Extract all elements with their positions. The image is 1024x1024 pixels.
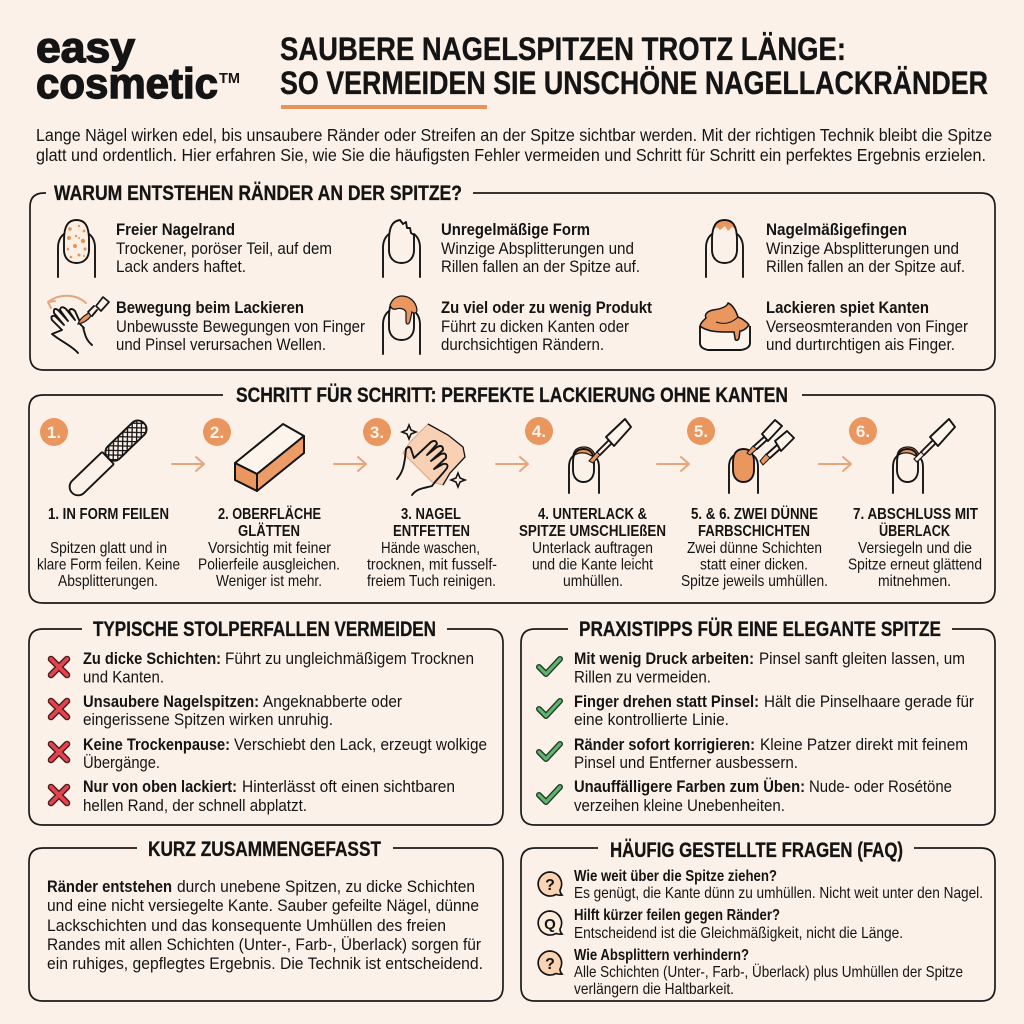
- step 6: 6.: [856, 422, 870, 441]
- praxistipps list: Pinsel und Entferner ausbessern.: [574, 753, 798, 772]
- panel: kurz zusammengefasst: [29, 838, 503, 1001]
- arrow 4: [657, 457, 689, 471]
- faq 1: [538, 868, 983, 902]
- x icons: [51, 659, 67, 803]
- title: [280, 31, 988, 109]
- summary text: [47, 877, 483, 973]
- faq 3: verlängern die Haltbarkeit.: [574, 981, 734, 998]
- step 6: Versiegeln und die: [858, 540, 972, 557]
- stolperfallen list: Nur von oben lackiert:: [83, 777, 237, 796]
- stolperfallen list: Führt zu ungleichmäßigem Trocknen: [225, 649, 474, 668]
- step 4: und die Kante leicht: [532, 556, 654, 574]
- logo: cosmetic: [36, 60, 218, 108]
- praxistipps list: Kleine Patzer direkt mit feinem: [760, 735, 968, 754]
- faq 3: Alle Schichten (Unter-, Farb-, Überlack) plus Umhüllen der Spitze: [574, 963, 963, 981]
- stolperfallen list: Verschiebt den Lack, erzeugt wolkige: [234, 735, 487, 754]
- summary text: Randes mit allen Schichten (Unter-, Farb-, Überlack) sorgen für: [47, 935, 481, 954]
- step 4: 4.: [532, 422, 546, 441]
- item: bewegung beim lackieren: Unbewusste Bewegungen von Finger: [116, 317, 365, 336]
- item: zu viel oder zu wenig produkt: durchsichtigen Rändern.: [441, 335, 604, 354]
- stolperfallen list: Zu dicke Schichten:: [83, 649, 221, 668]
- faq 3: [538, 947, 963, 998]
- step 2: Weniger ist mehr.: [216, 573, 322, 590]
- item: nagelmaessigefingen: Winzige Absplitterungen und: [766, 239, 959, 258]
- step 3: 3.: [370, 423, 384, 442]
- arrow 5: [819, 457, 851, 471]
- item: zu viel oder zu wenig produkt: Führt zu dicken Kanten oder: [441, 317, 629, 336]
- item: nagelmaessigefingen: Nagelmäßigefingen: [766, 220, 907, 239]
- stolperfallen list: [83, 649, 487, 815]
- praxistipps list: Mit wenig Druck arbeiten:: [574, 649, 754, 668]
- summary text: ein ruhiges, gepflegtes Ergebnis. Die Technik ist entscheidend.: [47, 954, 483, 973]
- item: nagelmaessigefingen: Rillen fallen an der Spitze auf.: [766, 257, 965, 276]
- step 3: freiem Tuch reinigen.: [367, 573, 496, 590]
- step 6: mitnehmen.: [878, 573, 951, 590]
- step 1: 1.: [47, 423, 61, 442]
- panel: praxistipps: [521, 618, 995, 825]
- step 3: ENTFETTEN: [393, 523, 470, 540]
- faq 1: Wie weit über die Spitze ziehen?: [574, 868, 777, 885]
- praxistipps list: Nude- oder Rosétöne: [809, 777, 952, 796]
- item: unregelmaessige form: Unregelmäßige Form: [441, 220, 590, 239]
- summary text: durch unebene Spitzen, zu dicke Schichten: [177, 877, 475, 896]
- item: unregelmaessige form: Rillen fallen an der Spitze auf.: [441, 257, 640, 276]
- step 3: 3. NAGEL: [401, 506, 461, 523]
- step 4: [519, 417, 666, 590]
- item: bewegung beim lackieren: Bewegung beim Lackieren: [116, 298, 304, 317]
- stolperfallen list: Hinterlässt oft einen sichtbaren: [242, 777, 455, 796]
- heading: warum: WARUM ENTSTEHEN RÄNDER AN DER SPITZE?: [54, 182, 462, 205]
- summary text: Ränder entstehen: [47, 877, 172, 896]
- praxistipps list: Pinsel sanft gleiten lassen, um: [759, 649, 965, 668]
- stolperfallen list: Angeknabberte oder: [263, 692, 402, 711]
- panel: warum entstehen raender: [30, 182, 995, 370]
- item: freier nagelrand: Lack anders haftet.: [116, 257, 246, 276]
- step 2: [198, 418, 340, 590]
- praxistipps list: Hält die Pinselhaare gerade für: [764, 692, 974, 711]
- step 1: 1. IN FORM FEILEN: [48, 506, 169, 523]
- step 5: Zwei dünne Schichten: [687, 540, 822, 557]
- praxistipps list: verzeihen kleine Unebenheiten.: [574, 796, 785, 815]
- step 5: Spitze jeweils umhüllen.: [681, 573, 828, 590]
- step 6: Spitze erneut glättend: [848, 556, 982, 574]
- step 5: 5. & 6. ZWEI DÜNNE: [691, 504, 818, 523]
- step 2: 2. OBERFLÄCHE: [218, 505, 321, 523]
- step 2: 2.: [210, 423, 224, 442]
- panel: stolperfallen: [29, 618, 503, 825]
- item: lackieren spiet kanten: Lackieren spiet Kanten: [766, 298, 929, 317]
- item: bewegung beim lackieren: [48, 296, 365, 354]
- step 2: GLÄTTEN: [238, 522, 300, 540]
- summary text: Lackschichten und das konsequente Umhüllen des freien: [47, 916, 446, 935]
- step 5: 5.: [694, 422, 708, 441]
- arrow 3: [496, 457, 528, 471]
- panel: schritt fuer schritt: [29, 384, 995, 603]
- heading: praxistipps: PRAXISTIPPS FÜR EINE ELEGANTE SPITZE: [579, 618, 941, 641]
- logo: easy: [36, 24, 135, 72]
- step 5: [681, 417, 828, 590]
- praxistipps list: Ränder sofort korrigieren:: [574, 735, 755, 754]
- praxistipps list: Rillen zu vermeiden.: [574, 668, 711, 686]
- panel: faq: [521, 839, 995, 1001]
- item: freier nagelrand: Trockener, poröser Teil, auf dem: [116, 239, 332, 258]
- stolperfallen list: Unsaubere Nagelspitzen:: [83, 692, 259, 711]
- step 4: SPITZE UMSCHLIEßEN: [519, 523, 666, 540]
- step 5: FARBSCHICHTEN: [698, 523, 810, 540]
- step 1: [37, 417, 180, 590]
- step 1: Absplitterungen.: [58, 573, 158, 590]
- item: freier nagelrand: [58, 220, 332, 277]
- item: lackieren spiet kanten: [700, 298, 968, 354]
- step 3: trocknen, mit fusself-: [367, 556, 497, 574]
- arrow 1: [172, 457, 204, 471]
- step 3: [363, 418, 497, 590]
- faq 2: Entscheidend ist die Gleichmäßigkeit, nicht die Länge.: [574, 925, 903, 942]
- step 2: Vorsichtig mit feiner: [208, 540, 331, 557]
- step 5: statt einer dicken.: [700, 556, 808, 574]
- praxistipps list: Unauffälligere Farben zum Üben:: [574, 777, 805, 796]
- item: lackieren spiet kanten: Verseosmteranden von Finger: [766, 317, 968, 336]
- faq 2: [538, 907, 903, 942]
- item: unregelmaessige form: [383, 220, 640, 277]
- heading: stolperfallen: TYPISCHE STOLPERFALLEN VERMEIDEN: [93, 618, 436, 641]
- praxistipps list: [574, 649, 974, 815]
- step 1: klare Form feilen. Keine: [37, 556, 180, 574]
- stolperfallen list: hellen Rand, der schnell abplatzt.: [83, 796, 307, 815]
- stolperfallen list: Keine Trockenpause:: [83, 735, 230, 754]
- step 4: Unterlack auftragen: [532, 540, 653, 557]
- item: nagelmaessigefingen: [706, 220, 965, 277]
- item: unregelmaessige form: Winzige Absplitterungen und: [441, 239, 634, 258]
- logo: TM: [219, 70, 240, 87]
- step 6: ÜBERLACK: [879, 521, 950, 540]
- check icons: [539, 659, 560, 802]
- step 4: 4. UNTERLACK &: [538, 506, 647, 523]
- title: SAUBERE NAGELSPITZEN TROTZ LÄNGE:: [280, 31, 846, 67]
- intro text: [36, 125, 992, 165]
- heading: zusammenfassung: KURZ ZUSAMMENGEFASST: [148, 838, 381, 861]
- step 6: [848, 417, 982, 590]
- step 1: Spitzen glatt und in: [50, 540, 167, 557]
- faq 3: ?: [545, 956, 555, 973]
- summary text: und eine nicht versiegelte Kante. Sauber gefeilte Nägel, dünne: [47, 896, 479, 915]
- item: zu viel oder zu wenig produkt: [383, 296, 652, 354]
- item: lackieren spiet kanten: und durtırchtigen ais Finger.: [766, 335, 955, 354]
- item: zu viel oder zu wenig produkt: Zu viel oder zu wenig Produkt: [441, 298, 652, 317]
- praxistipps list: Finger drehen statt Pinsel:: [574, 692, 759, 711]
- faq 2: Hilft kürzer feilen gegen Ränder?: [574, 907, 780, 924]
- arrow 2: [334, 457, 366, 471]
- faq 3: Wie Absplittern verhindern?: [574, 947, 749, 964]
- step 2: Polierfeile ausgleichen.: [198, 556, 340, 574]
- step 6: 7. ABSCHLUSS MIT: [853, 506, 978, 523]
- faq 2: Q: [544, 916, 556, 933]
- praxistipps list: eine kontrollierte Linie.: [574, 710, 729, 729]
- item: freier nagelrand: Freier Nagelrand: [116, 220, 235, 239]
- heading: schritte: SCHRITT FÜR SCHRITT: PERFEKTE LACKIERUNG OHNE KANTEN: [236, 384, 788, 407]
- step 3: Hände waschen,: [381, 540, 480, 557]
- item: bewegung beim lackieren: und Pinsel verursachen Wellen.: [116, 335, 326, 354]
- stolperfallen list: und Kanten.: [83, 668, 164, 686]
- stolperfallen list: Übergänge.: [83, 753, 160, 772]
- step 4: umhüllen.: [563, 573, 623, 590]
- faq 1: ?: [545, 877, 555, 894]
- logo: [36, 24, 240, 108]
- stolperfallen list: eingerissene Spitzen wirken unruhig.: [83, 710, 333, 729]
- heading: faq: HÄUFIG GESTELLTE FRAGEN (FAQ): [610, 839, 903, 862]
